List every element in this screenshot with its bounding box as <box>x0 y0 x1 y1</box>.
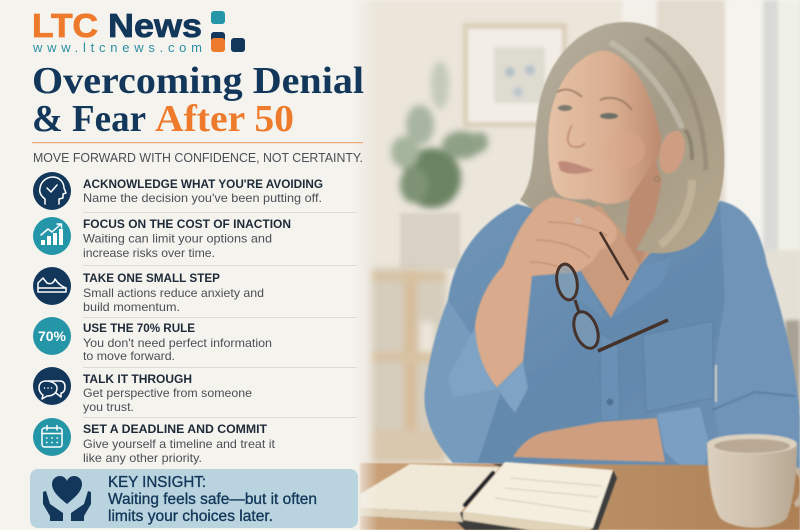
shirt collar <box>566 258 672 318</box>
step 1: acknowledge: Name the decision you've been putting off. <box>83 191 322 205</box>
potted plant <box>391 61 488 269</box>
icon: 70 percent: 70% <box>38 328 67 344</box>
icon: heart held by hands <box>43 476 91 521</box>
logo: LTC News <box>32 7 245 55</box>
callout: key insight: KEY INSIGHT: <box>108 474 206 491</box>
wall picture frame <box>463 23 567 127</box>
icon: head with check <box>33 172 71 210</box>
logo: LTC News: www.ltcnews.com <box>32 40 202 55</box>
open notebook and pen <box>360 462 617 530</box>
neck and chest <box>572 185 662 318</box>
title: After 50 <box>155 98 294 140</box>
step 1: acknowledge: ACKNOWLEDGE WHAT YOU'RE AVOIDING <box>83 177 323 191</box>
rolled right sleeve cuff <box>657 407 708 468</box>
coffee mug <box>707 434 800 528</box>
neck shadow beside jaw <box>625 160 662 265</box>
rolled left sleeve cuff <box>448 328 528 413</box>
pen <box>465 473 493 505</box>
step 2: cost of inaction: increase risks over time. <box>83 246 215 260</box>
step 2: cost of inaction: FOCUS ON THE COST OF INACTION <box>83 217 291 231</box>
title <box>32 60 364 140</box>
step 5: talk it through: Get perspective from someone <box>83 386 252 400</box>
step 3: small step: TAKE ONE SMALL STEP <box>83 271 220 285</box>
wooden shelf <box>370 268 446 463</box>
step 3: small step <box>33 267 264 314</box>
callout: key insight: Waiting feels safe—but it often <box>108 491 317 508</box>
hair, front strands <box>521 24 724 253</box>
icon: 70 percent <box>33 317 71 355</box>
step 5: talk it through: you trust. <box>83 400 134 414</box>
ear and earring <box>654 128 689 182</box>
wooden table <box>360 463 800 530</box>
shirt placket and button <box>600 332 620 421</box>
icon: shoe <box>33 267 71 305</box>
step 6: deadline: Give yourself a timeline and treat it <box>83 437 276 451</box>
logo: LTC News: LTC <box>32 7 98 44</box>
step 6: deadline <box>33 418 276 465</box>
step 4: 70% rule: USE THE 70% RULE <box>83 321 195 335</box>
logo: LTC News: News <box>108 7 202 44</box>
step 5: talk it through <box>33 367 252 414</box>
step 3: small step: build momentum. <box>83 300 180 314</box>
hair, back layer <box>520 22 724 253</box>
callout: key insight: limits your choices later. <box>108 508 273 525</box>
blue denim shirt <box>424 201 800 472</box>
icon: speech bubbles <box>33 367 71 405</box>
step 4: 70% rule: to move forward. <box>83 349 175 363</box>
step 2: cost of inaction: Waiting can limit your options and <box>83 232 272 246</box>
callout: key insight <box>30 469 358 528</box>
step 1: acknowledge <box>33 172 323 210</box>
step 4: 70% rule: You don't need perfect information <box>83 336 272 350</box>
step 6: deadline: SET A DEADLINE AND COMMIT <box>83 422 268 436</box>
forearm resting on table <box>513 418 665 462</box>
title: Overcoming Denial <box>32 60 364 102</box>
step 6: deadline: like any other priority. <box>83 451 202 465</box>
step 3: small step: Small actions reduce anxiety and <box>83 286 264 300</box>
face <box>548 50 662 204</box>
title: & Fear <box>32 98 146 140</box>
step 5: talk it through: TALK IT THROUGH <box>83 372 192 386</box>
icon: rising chart <box>33 217 71 255</box>
photo: woman at a table, thinking <box>340 0 800 530</box>
photo background: room <box>340 0 800 530</box>
shirt pocket <box>643 321 713 412</box>
step 4: 70% rule <box>33 317 272 363</box>
step 2: cost of inaction <box>33 217 291 260</box>
tagline: MOVE FORWARD WITH CONFIDENCE, NOT CERTAINTY. <box>33 150 363 165</box>
tortoiseshell glasses <box>554 232 668 352</box>
left panel background <box>0 0 378 530</box>
facial features <box>557 90 645 174</box>
raised forearm and hand <box>475 197 617 388</box>
icon: calendar <box>33 418 71 456</box>
